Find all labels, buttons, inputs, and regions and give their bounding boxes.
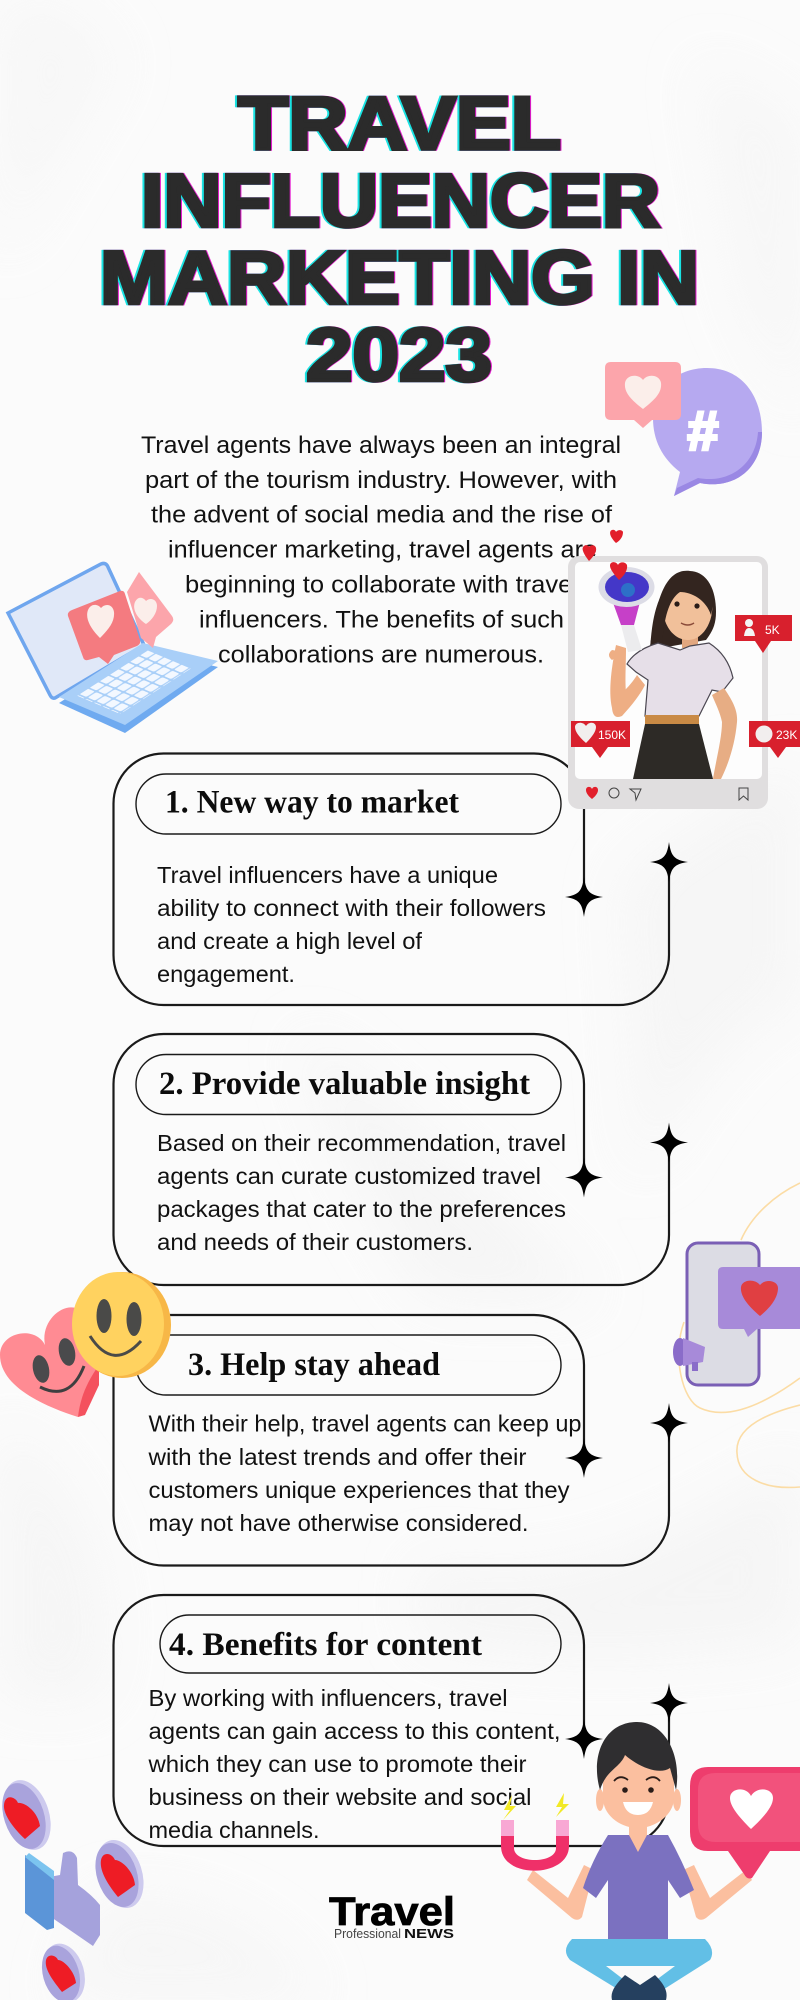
- intro paragraph: [141, 432, 621, 668]
- illustration: seated man with magnet and heart: [501, 1722, 800, 2000]
- arms: [527, 1865, 752, 1920]
- heading pill: [136, 1335, 561, 1395]
- social post frame with influencer: [568, 530, 800, 809]
- head: [596, 1722, 681, 1828]
- icon: thumbs up with heart badges: [0, 1774, 152, 2000]
- badge: 150K likes: [571, 721, 630, 758]
- icon: hashtag and heart bubbles: [605, 362, 762, 496]
- intro paragraph: collaborations are numerous.: [218, 642, 544, 668]
- heading pill: 2. Provide valuable insight: [159, 1066, 530, 1102]
- panel: card 2 provide valuable insight: [114, 1034, 688, 1285]
- floating hearts: [583, 530, 627, 580]
- heading pill: [136, 1054, 561, 1114]
- body text: with the latest trends and offer their: [147, 1444, 527, 1470]
- badge: 23K comments: 23K: [776, 728, 797, 742]
- badge: 23K comments: [749, 721, 800, 758]
- magnet: [501, 1793, 569, 1871]
- heading pill: 3. Help stay ahead: [188, 1347, 440, 1383]
- shirt: [583, 1835, 694, 1939]
- body text: [157, 1130, 566, 1255]
- heading pill: [160, 1615, 561, 1673]
- intro paragraph: the advent of social media and the rise of: [151, 502, 612, 528]
- body text: which they can use to promote their: [147, 1751, 527, 1777]
- panel: card 4 benefits for content: [114, 1595, 688, 1846]
- intro paragraph: beginning to collaborate with travel: [185, 572, 578, 598]
- neck: [629, 1815, 647, 1852]
- body text: and create a high level of: [157, 928, 423, 954]
- body text: business on their website and social: [148, 1784, 532, 1810]
- sparkles: [565, 1122, 688, 1198]
- icon: hashtag and heart bubbles: #: [687, 399, 719, 462]
- megaphone: [598, 567, 654, 660]
- title: MARKETING IN: [100, 236, 699, 320]
- sparkles: [565, 1403, 688, 1478]
- badge: 5K followers: 5K: [765, 623, 780, 637]
- icon: smiley heart and smiley coin: [0, 1272, 171, 1417]
- title: 2023: [306, 312, 492, 396]
- badge: 150K likes: 150K: [598, 728, 626, 742]
- body text: packages that cater to the preferences: [157, 1196, 566, 1222]
- badge: 5K followers: [735, 615, 792, 653]
- body text: agents can gain access to this content,: [148, 1718, 560, 1744]
- title: TRAVEL: [238, 81, 561, 165]
- intro paragraph: influencers. The benefits of such: [199, 606, 564, 634]
- body text: ability to connect with their followers: [157, 895, 546, 921]
- body text: customers unique experiences that they: [148, 1477, 570, 1503]
- logo: Travel Professional News: NEWS: [404, 1926, 454, 1941]
- legs: [566, 1939, 712, 2000]
- sparkles: [565, 842, 688, 917]
- body text: Based on their recommendation, travel: [157, 1130, 566, 1156]
- body text: and needs of their customers.: [157, 1229, 473, 1255]
- intro paragraph: part of the tourism industry. However, with: [145, 467, 617, 494]
- post action icons: [586, 787, 748, 800]
- decorative orange curves: [679, 1183, 800, 1487]
- panel: card 3 help stay ahead: [114, 1315, 688, 1566]
- body text: engagement.: [157, 961, 295, 987]
- title: [100, 81, 699, 396]
- icon: phone with heart message: [673, 1243, 800, 1385]
- body text: [147, 1685, 560, 1843]
- heading pill: 4. Benefits for content: [169, 1627, 482, 1663]
- body text: media channels.: [148, 1817, 320, 1843]
- body text: Travel influencers have a unique: [157, 862, 498, 888]
- body text: agents can curate customized travel: [157, 1163, 541, 1189]
- logo: Travel Professional News: Travel: [329, 1890, 455, 1934]
- logo: Travel Professional News: Professional: [334, 1926, 401, 1941]
- panel: card 1 new way to market: [114, 754, 688, 1005]
- sparkles: [565, 1683, 688, 1759]
- heading pill: [136, 774, 561, 834]
- body text: By working with influencers, travel: [148, 1685, 507, 1711]
- body text: [157, 862, 546, 987]
- heading pill: 1. New way to market: [165, 784, 459, 820]
- intro paragraph: Travel agents have always been an integral: [141, 432, 621, 459]
- intro paragraph: influencer marketing, travel agents are: [168, 536, 597, 564]
- heart bubble: [690, 1767, 800, 1878]
- body text: [147, 1410, 582, 1536]
- body text: With their help, travel agents can keep up: [148, 1410, 582, 1436]
- body text: may not have otherwise considered.: [148, 1510, 528, 1536]
- title: INFLUENCER: [141, 158, 660, 242]
- icon: laptop with hearts: [8, 563, 218, 733]
- influencer woman: [610, 571, 737, 779]
